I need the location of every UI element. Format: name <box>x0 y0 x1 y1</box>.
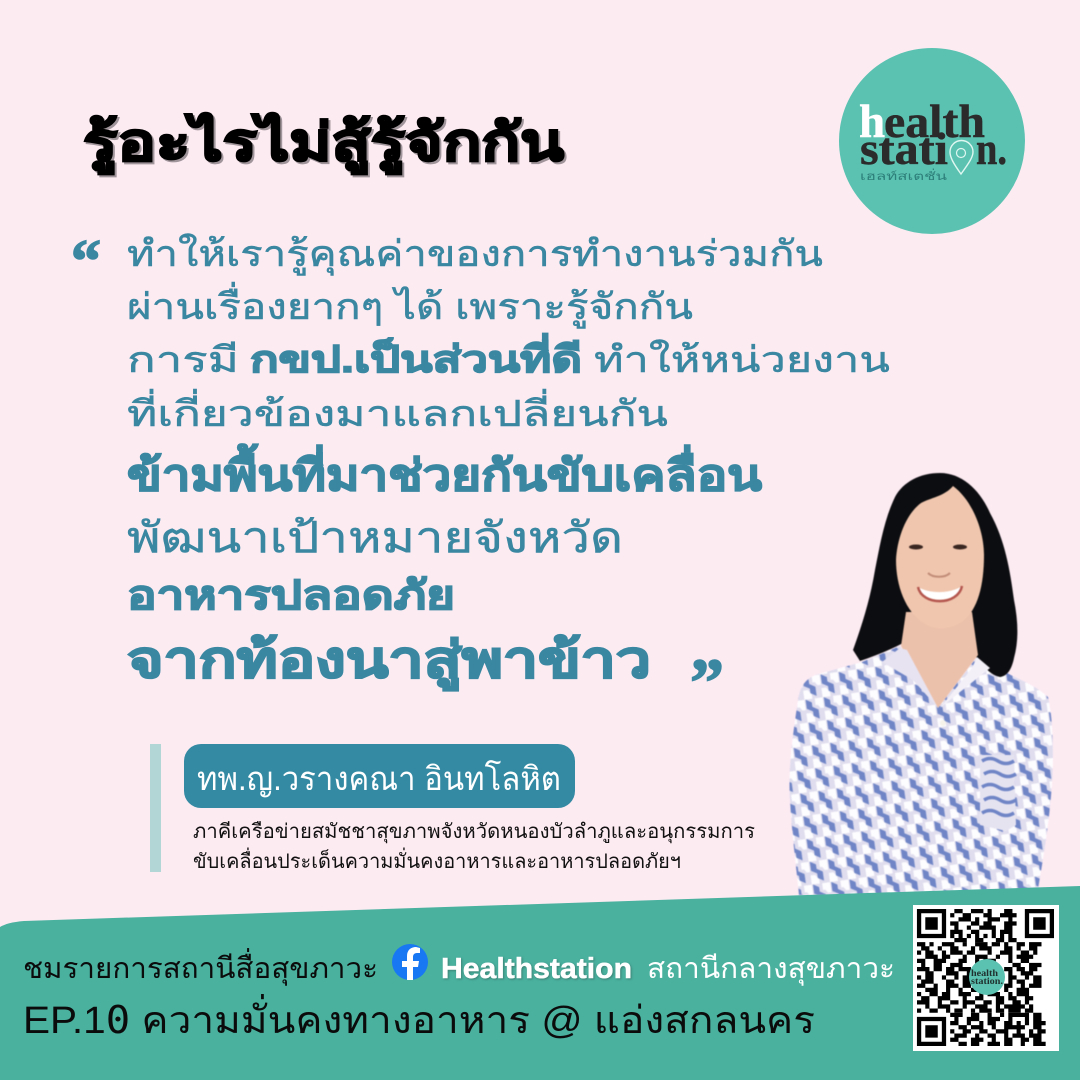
eyes <box>909 544 967 550</box>
shirt pocket <box>980 755 1016 831</box>
neck <box>901 612 978 708</box>
QR centre logo: station. <box>971 976 1003 986</box>
footer line one: Healthstation <box>441 953 632 985</box>
footer line two: episode: EP.10 ความมั่นคงทางอาหาร @ แอ่งสกลนคร <box>23 994 815 1042</box>
smile <box>918 586 962 601</box>
role description: ภาคีเครือข่ายสมัชชาสุขภาพจังหวัดหนองบัวลำภูและอนุกรรมการ <box>193 821 755 844</box>
logo: health station: stati <box>860 124 948 174</box>
quote block: ข้ามพื้นที่มาช่วยกันขับเคลื่อน <box>127 443 763 500</box>
QR centre logo: health <box>971 968 998 978</box>
quote block: ที่เกี่ยวข้องมาแลกเปลี่ยนกัน <box>127 389 668 434</box>
nose <box>928 573 950 577</box>
name pill <box>184 744 575 808</box>
name pill: ทพ.ญ.วรางคณา อินทโลหิต <box>197 760 561 797</box>
role description <box>193 821 755 873</box>
role description: ขับเคลื่อนประเด็นความมั่นคงอาหารและอาหารปลอดภัยฯ <box>193 847 681 873</box>
closing quotation mark: ” <box>690 644 724 720</box>
hair <box>853 473 1017 677</box>
QR modules <box>917 911 1052 1044</box>
shirt <box>789 646 1053 895</box>
opening quotation mark: “ <box>71 228 101 294</box>
attribution <box>150 744 755 873</box>
quote block <box>71 228 890 720</box>
accent bar <box>150 744 161 872</box>
footer line one: สถานีกลางสุขภาวะ <box>647 953 895 986</box>
icon: facebook <box>392 944 428 980</box>
quote block: ทำให้หน่วยงาน <box>594 339 890 380</box>
logo: health station: n. <box>976 124 1007 174</box>
quote block: การมี <box>127 339 239 380</box>
QR centre logo <box>969 959 1005 995</box>
quote block: ผ่านเรื่องยากๆ ได้ เพราะรู้จักกัน <box>127 282 693 329</box>
face <box>896 486 984 628</box>
footer line one: ชมรายการสถานีสื่อสุขภาวะ <box>23 948 378 986</box>
shirt collar <box>882 648 990 726</box>
quote block: อาหารปลอดภัย <box>127 574 455 618</box>
logo: health station: ealth <box>884 96 985 148</box>
QR code <box>913 905 1059 1051</box>
quote block: พัฒนาเป้าหมายจังหวัด <box>127 514 623 561</box>
logo: health station <box>839 48 1025 234</box>
footer line one <box>23 944 895 986</box>
title: รู้อะไรไม่สู้รู้จักกัน <box>83 112 565 175</box>
logo: health station: เฮลท์สเตชั่น <box>860 168 948 183</box>
quote block: ทำให้เรารู้คุณค่าของการทำงานร่วมกัน <box>127 233 823 276</box>
quote block: จากท้องนาสู่พาข้าว <box>127 632 651 691</box>
quote block: กขป.เป็นส่วนที่ดี <box>250 333 582 380</box>
logo: health station: h <box>859 96 885 148</box>
footer band <box>0 886 1080 1080</box>
portrait <box>789 473 1053 895</box>
